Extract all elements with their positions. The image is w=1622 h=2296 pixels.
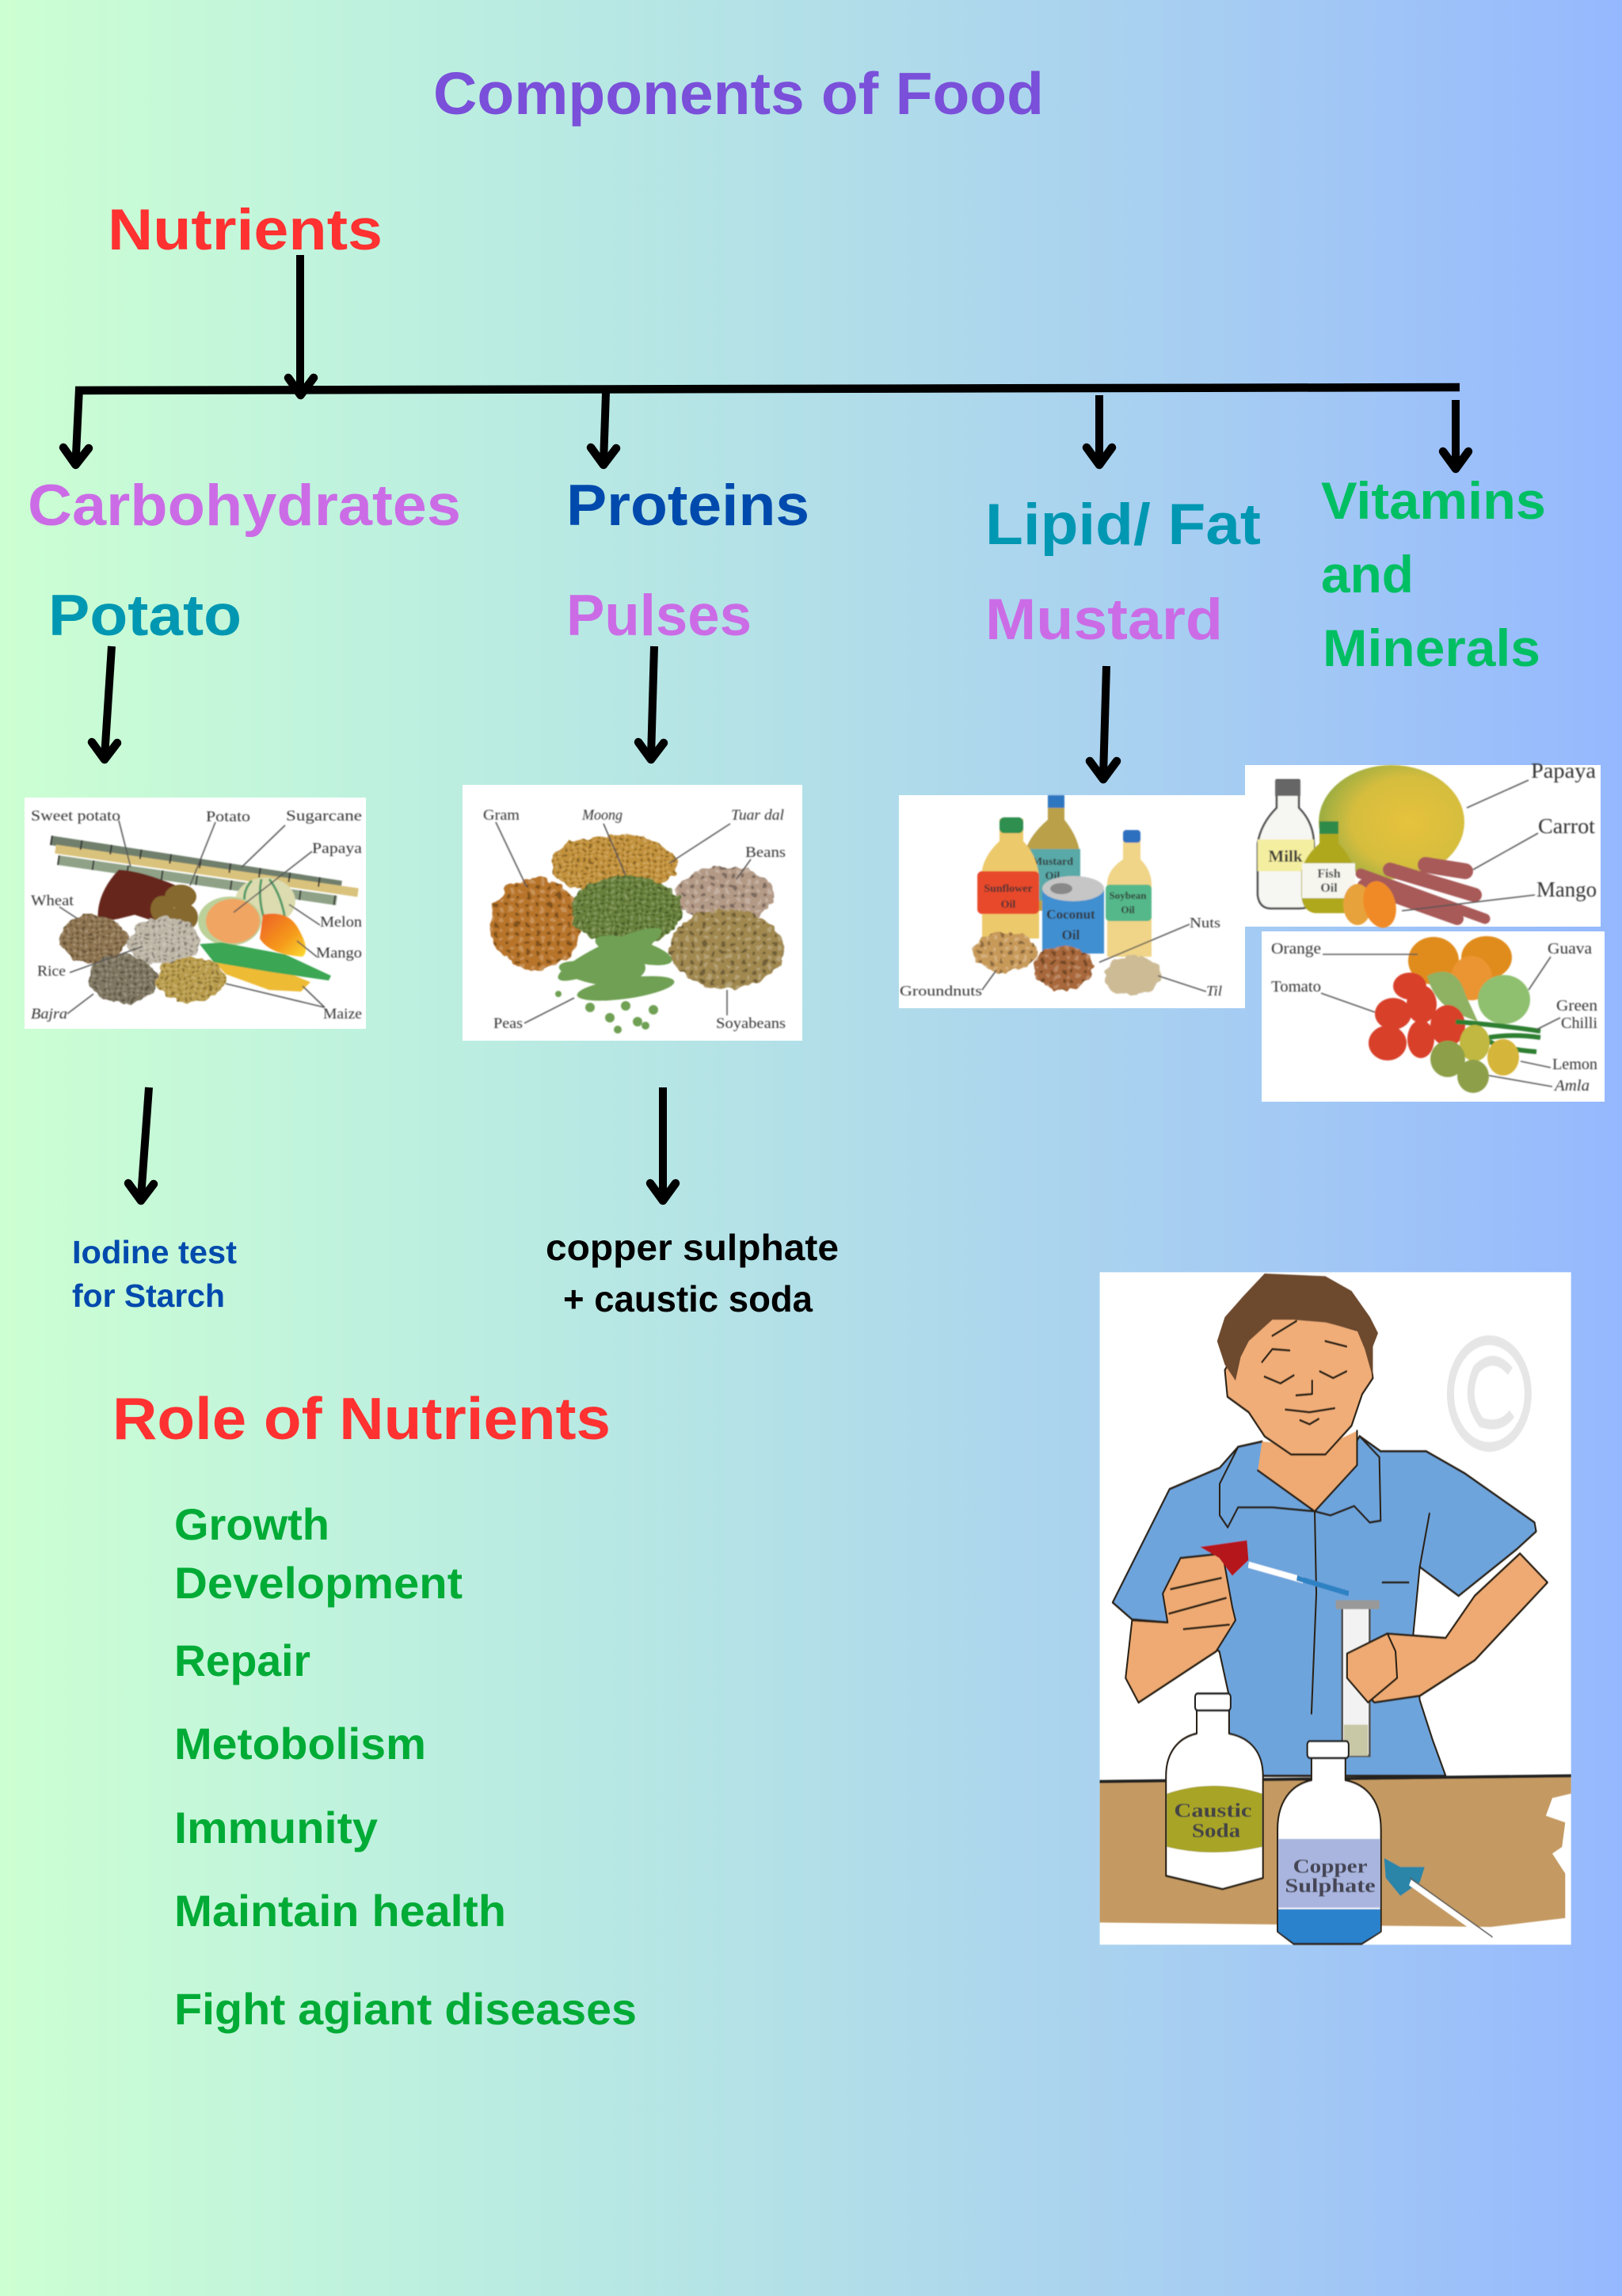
facial features bbox=[1262, 1321, 1346, 1424]
picture: milk, fish oil, papaya, carrot, mango bbox=[1245, 759, 1601, 931]
tree connector: stem and horizontal bar bbox=[75, 255, 1460, 395]
food label: Pulses: Pulses bbox=[566, 584, 752, 648]
mango bbox=[1343, 878, 1401, 931]
arrow to Vitamins and Minerals bbox=[1443, 400, 1468, 469]
arrow from Potato bbox=[92, 646, 117, 760]
hand on test tube bbox=[1347, 1634, 1397, 1703]
copper sulphate bottle bbox=[1277, 1741, 1381, 1944]
sugarcane stalks bbox=[51, 840, 358, 901]
heading: Vitamins and Minerals: Minerals bbox=[1323, 619, 1540, 677]
leader lines bbox=[59, 821, 325, 1014]
arrow to Lipid/Fat bbox=[1087, 395, 1112, 465]
coconut oil can: Oil bbox=[1062, 927, 1080, 942]
mustard oil bottle bbox=[1024, 795, 1080, 911]
picture: oils and nuts bbox=[899, 795, 1245, 1008]
caustic soda bottle bbox=[1166, 1693, 1263, 1889]
pulses labels: Moong bbox=[581, 807, 623, 824]
face bbox=[1225, 1307, 1373, 1454]
fruit labels: Guava bbox=[1548, 940, 1592, 958]
carbohydrate labels: Wheat bbox=[31, 893, 74, 909]
fruit labels: Amla bbox=[1553, 1077, 1590, 1095]
carrots bbox=[1361, 865, 1485, 919]
leader lines bbox=[1321, 954, 1560, 1087]
vitamin labels row one bbox=[1531, 759, 1597, 901]
table bbox=[1100, 1776, 1571, 1927]
nuts and til piles bbox=[973, 932, 1161, 996]
coconut oil can: Coconut bbox=[1046, 907, 1095, 922]
list: roles of nutrients: Maintain health bbox=[174, 1886, 506, 1936]
carbohydrate labels: Potato bbox=[206, 809, 250, 825]
copper sulphate bottle: Sulphate bbox=[1285, 1874, 1376, 1897]
hair bbox=[1217, 1274, 1378, 1380]
arrow to copper sulphate test bbox=[650, 1087, 676, 1201]
fruit labels: Orange bbox=[1271, 940, 1321, 958]
dropper on table bbox=[1384, 1858, 1492, 1940]
sweet potatoes bbox=[98, 870, 176, 923]
watermark bbox=[1450, 1340, 1528, 1447]
vitamin labels row one: Carrot bbox=[1538, 814, 1596, 838]
fruit labels: Green bbox=[1556, 997, 1597, 1015]
left hand fingers bbox=[1169, 1578, 1229, 1629]
soybean oil bottle: Oil bbox=[1121, 904, 1135, 916]
list: roles of nutrients bbox=[174, 1499, 637, 2034]
fruit labels: Chilli bbox=[1561, 1015, 1597, 1032]
pulses labels: Peas bbox=[493, 1015, 523, 1032]
picture: fruits and vegetables bbox=[1262, 931, 1605, 1102]
picture: carbohydrate foods bbox=[25, 798, 366, 1029]
right arm and hand bbox=[1347, 1554, 1548, 1703]
milk bottle: Milk bbox=[1268, 847, 1303, 866]
fish oil bottle bbox=[1301, 821, 1355, 913]
text: iodine test for starch: Iodine test bbox=[72, 1234, 237, 1270]
carbohydrate labels: Maize bbox=[323, 1006, 362, 1022]
sunflower oil bottle: Oil bbox=[1001, 899, 1015, 911]
carbohydrate labels: Sugarcane bbox=[286, 808, 362, 824]
fruit labels: Lemon bbox=[1552, 1056, 1597, 1073]
shirt collar and placket bbox=[1220, 1436, 1430, 1714]
shirt bbox=[1113, 1436, 1536, 1776]
pulses labels: Soyabeans bbox=[716, 1015, 786, 1032]
leaf bbox=[1427, 972, 1478, 1022]
heading: Role of Nutrients: Role of Nutrients bbox=[112, 1385, 611, 1452]
arrow from Pulses bbox=[638, 646, 664, 760]
vitamin labels row one: Papaya bbox=[1531, 759, 1596, 782]
maize bbox=[200, 942, 331, 992]
potatoes bbox=[150, 885, 198, 931]
vitamin labels row one: Mango bbox=[1536, 878, 1597, 901]
oil labels: Til bbox=[1206, 983, 1222, 999]
pulses labels: Beans bbox=[745, 844, 786, 861]
coconut oil can bbox=[1042, 876, 1104, 954]
tomatoes bbox=[1369, 973, 1465, 1060]
carbohydrate labels: Papaya bbox=[312, 840, 363, 857]
list: roles of nutrients: Fight agiant diseases bbox=[174, 1984, 637, 2034]
arrow from Mustard bbox=[1090, 666, 1117, 779]
guava bbox=[1478, 975, 1530, 1024]
picture: boy testing food with caustic soda and copper sulphate bbox=[1100, 1272, 1571, 1944]
fish oil bottle: Fish bbox=[1317, 867, 1341, 881]
mustard oil bottle: Mustard bbox=[1032, 856, 1073, 868]
list: roles of nutrients: Repair bbox=[174, 1635, 310, 1685]
caustic soda bottle: Soda bbox=[1192, 1819, 1240, 1841]
pulse piles bbox=[489, 835, 784, 988]
leader lines bbox=[496, 822, 751, 1023]
whole melon with stripes bbox=[235, 878, 295, 925]
test tube bbox=[1336, 1601, 1380, 1756]
oil labels: Nuts bbox=[1190, 915, 1220, 931]
fish oil bottle: Oil bbox=[1320, 881, 1338, 895]
carbohydrate labels bbox=[31, 808, 363, 1022]
fruit labels: Tomato bbox=[1271, 978, 1321, 996]
mango bbox=[260, 914, 306, 957]
soybean oil bottle bbox=[1106, 830, 1152, 957]
text: copper sulphate + caustic soda bbox=[546, 1227, 839, 1319]
arrow to Proteins bbox=[591, 393, 616, 465]
cut melon bbox=[198, 897, 261, 946]
neck outline bbox=[1258, 1431, 1357, 1511]
text: copper sulphate + caustic soda: copper sulphate bbox=[546, 1227, 839, 1268]
pulses labels: Gram bbox=[483, 807, 520, 824]
dropper in hand bbox=[1200, 1540, 1349, 1593]
leader lines bbox=[1402, 780, 1538, 911]
green chillies bbox=[1456, 1022, 1540, 1052]
leader lines bbox=[982, 924, 1206, 992]
sunflower oil bottle bbox=[977, 817, 1039, 939]
arrow to Carbohydrates bbox=[63, 388, 89, 465]
carbohydrate labels: Bajra bbox=[31, 1006, 67, 1022]
mustard oil bottle: Oil bbox=[1045, 870, 1060, 882]
food label: Mustard: Mustard bbox=[985, 588, 1223, 652]
pulses labels: Tuar dal bbox=[731, 807, 784, 824]
sunflower oil bottle: Sunflower bbox=[984, 883, 1033, 895]
oil labels bbox=[900, 915, 1222, 999]
pulses labels bbox=[483, 807, 786, 1032]
caustic soda bottle: Caustic bbox=[1174, 1799, 1251, 1822]
heading: Vitamins and Minerals bbox=[1321, 471, 1546, 677]
oranges bbox=[1408, 936, 1512, 1000]
text: copper sulphate + caustic soda: + caustic soda bbox=[563, 1278, 813, 1319]
milk bottle bbox=[1258, 780, 1314, 908]
food label: Potato: Potato bbox=[48, 584, 242, 648]
heading: Lipid/ Fat: Lipid/ Fat bbox=[985, 493, 1261, 557]
title: Components of Food bbox=[433, 60, 1044, 127]
heading: Proteins: Proteins bbox=[566, 474, 809, 538]
list: roles of nutrients: Immunity bbox=[174, 1803, 378, 1852]
soybean oil bottle: Soybean bbox=[1110, 889, 1147, 901]
neck bbox=[1258, 1431, 1357, 1511]
heading: Vitamins and Minerals: Vitamins bbox=[1321, 471, 1546, 530]
carbohydrate labels: Rice bbox=[37, 963, 66, 980]
text: iodine test for starch bbox=[72, 1234, 237, 1314]
list: roles of nutrients: Metobolism bbox=[174, 1719, 426, 1769]
lemons and amla bbox=[1430, 1025, 1519, 1093]
text: iodine test for starch: for Starch bbox=[72, 1277, 225, 1314]
heading: Nutrients: Nutrients bbox=[108, 198, 383, 262]
list: roles of nutrients: Development bbox=[174, 1558, 463, 1608]
heading: Carbohydrates: Carbohydrates bbox=[28, 474, 461, 538]
list: roles of nutrients: Growth bbox=[174, 1499, 329, 1549]
carbohydrate labels: Mango bbox=[316, 945, 362, 961]
carbohydrate labels: Melon bbox=[320, 914, 363, 931]
arrow to iodine test bbox=[128, 1087, 154, 1201]
grain piles bbox=[59, 915, 226, 1003]
fruit labels bbox=[1271, 940, 1597, 1095]
oil labels: Groundnuts bbox=[900, 983, 982, 999]
pea pods and peas bbox=[553, 920, 676, 1034]
copper sulphate bottle: Copper bbox=[1293, 1855, 1368, 1877]
left arm and hand bbox=[1125, 1554, 1236, 1703]
heading: Vitamins and Minerals: and bbox=[1321, 545, 1414, 604]
picture: pulses bbox=[463, 785, 802, 1041]
papaya bbox=[1319, 765, 1464, 879]
carbohydrate labels: Sweet potato bbox=[31, 808, 120, 824]
